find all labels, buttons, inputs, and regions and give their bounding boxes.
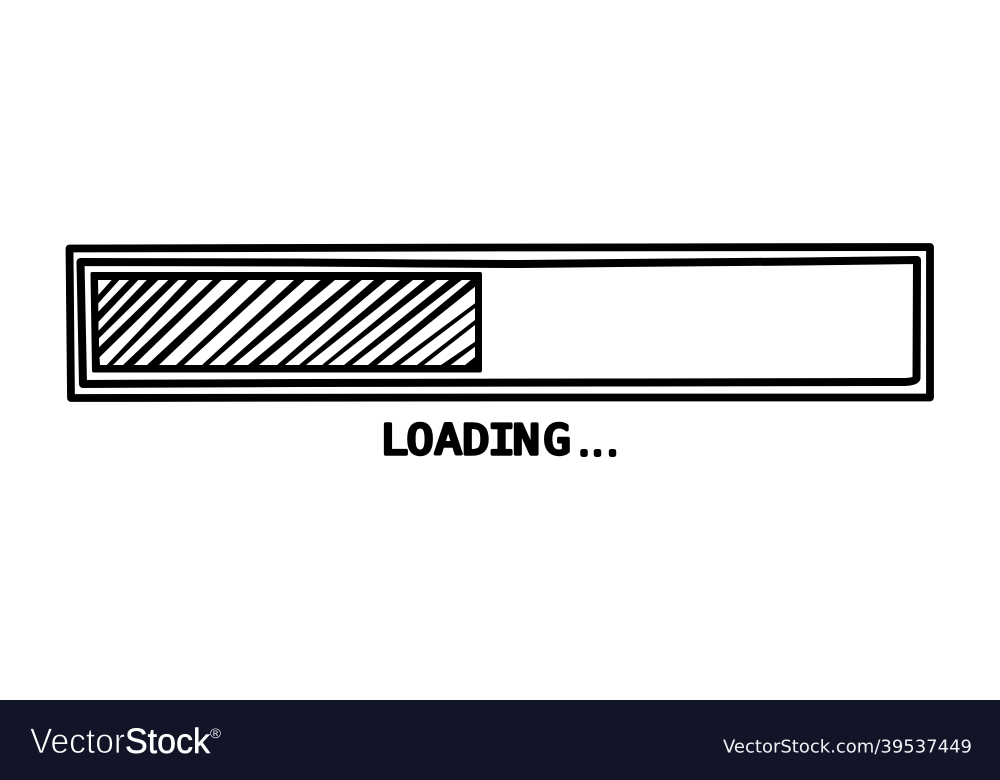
logo word: Stock: Stock — [125, 722, 210, 761]
footer band — [0, 700, 1000, 780]
progress bar — [70, 247, 930, 398]
loading label — [381, 417, 619, 465]
hatching stripes — [98, 280, 475, 365]
logo word: Vector: Vector — [30, 722, 125, 761]
footer logo — [30, 722, 222, 761]
label dots: ... — [578, 436, 619, 460]
filled progress segment with diagonal hatching — [90, 272, 482, 372]
label word: LOADING — [381, 417, 571, 465]
footer image id: VectorStock.com/39537449 — [723, 736, 972, 758]
inner frame — [80, 260, 917, 384]
progress segment border — [90, 272, 482, 372]
outer frame — [70, 247, 930, 398]
logo registered mark: ® — [210, 725, 222, 741]
